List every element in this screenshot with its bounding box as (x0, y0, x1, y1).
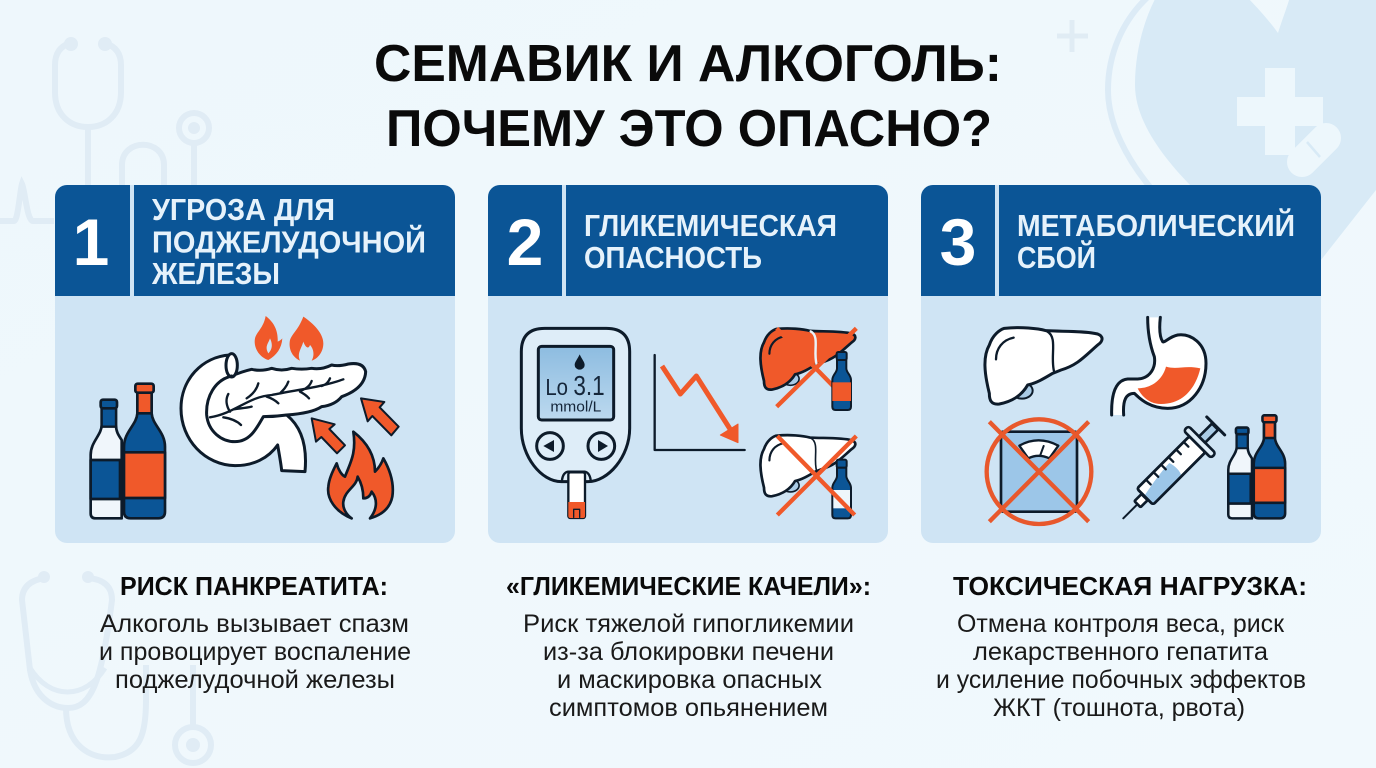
text block: toxic load: и усиление побочных эффектов (936, 666, 1306, 694)
panel 2 header: ГЛИКЕМИЧЕСКАЯ (584, 208, 837, 243)
panel 1 header: 1 (73, 205, 109, 279)
text block: glycemic swings (506, 571, 871, 722)
text block: pancreatitis risk: Алкоголь вызывает спазм (100, 610, 409, 638)
icon: crossed-out scale (987, 419, 1091, 524)
icon: glucose meter: mmol/L (550, 399, 601, 415)
title: СЕМАВИК И АЛКОГОЛЬ: (374, 35, 1002, 93)
icon: pancreas (181, 354, 366, 472)
icon: glucose meter: Lo (545, 374, 568, 400)
text block: toxic load: лекарственного гепатита (973, 638, 1268, 666)
icon: glucose meter (521, 328, 630, 518)
text block: pancreatitis risk: и провоцирует воспаление (99, 638, 411, 666)
panel 1 header: УГРОЗА ДЛЯ (152, 192, 335, 227)
panel 1 background (55, 185, 455, 543)
chart: falling glucose (655, 355, 745, 450)
icon: glucose meter: 3.1 (573, 370, 605, 401)
text block: toxic load: ЖКТ (тошнота, рвота) (993, 694, 1245, 722)
panel 1 illustration (91, 316, 399, 518)
panel 3 background (921, 185, 1321, 543)
text block: toxic load: ТОКСИЧЕСКАЯ НАГРУЗКА: (953, 571, 1307, 601)
panel 3 header: СБОЙ (1017, 239, 1096, 275)
panel 3 header: 3 (940, 205, 976, 279)
icon: stomach (1112, 317, 1206, 415)
icon: crossed orange liver with bottle (760, 328, 856, 410)
icon: liver (985, 328, 1102, 404)
text block: pancreatitis risk: поджелудочной железы (115, 666, 395, 694)
panel 2 illustration (521, 328, 856, 518)
text block: pancreatitis risk: РИСК ПАНКРЕАТИТА: (120, 571, 388, 601)
icon: big flame (328, 432, 393, 518)
panel 1: pancreas threat (55, 185, 455, 543)
icon: bottles (91, 384, 165, 518)
text block: glycemic swings: из-за блокировки печени (543, 638, 834, 666)
panel 2: glycemic danger (488, 185, 888, 543)
background: stethoscope top left (0, 37, 209, 221)
panel 2 header: ОПАСНОСТЬ (584, 240, 762, 275)
panel 3 header (921, 185, 1321, 296)
icon: crossed white liver with bottle (760, 435, 856, 518)
icon: bottles (1228, 415, 1285, 518)
title: ПОЧЕМУ ЭТО ОПАСНО? (386, 100, 992, 158)
text block: toxic load: Отмена контроля веса, риск (957, 610, 1285, 638)
text block: toxic load (936, 571, 1307, 722)
text block: pancreatitis risk (99, 571, 411, 694)
background: heart with cross and pill (1057, 0, 1376, 260)
icon: small flames (255, 316, 323, 361)
background: stethoscope bottom left (22, 571, 211, 763)
text block: glycemic swings: симптомов опьянением (549, 694, 828, 722)
icon: heat arrows (312, 398, 399, 453)
text block: glycemic swings: «ГЛИКЕМИЧЕСКИЕ КАЧЕЛИ»: (506, 571, 871, 601)
panel 3 header: МЕТАБОЛИЧЕСКИЙ (1017, 207, 1295, 243)
panel 2 background (488, 185, 888, 543)
icon: syringe (1110, 412, 1229, 532)
panel 1 header: ЖЕЛЕЗЫ (151, 256, 280, 291)
text block: glycemic swings: и маскировка опасных (557, 666, 823, 694)
panel 2 header: 2 (507, 205, 543, 279)
panel 1 header (55, 185, 455, 296)
panel 3 illustration (985, 317, 1285, 532)
panel 2 header (488, 185, 888, 296)
title (374, 35, 1002, 158)
text block: glycemic swings: Риск тяжелой гипогликемии (523, 610, 854, 638)
panel 3: metabolic failure (921, 185, 1321, 543)
panel 1 header: ПОДЖЕЛУДОЧНОЙ (152, 224, 426, 260)
